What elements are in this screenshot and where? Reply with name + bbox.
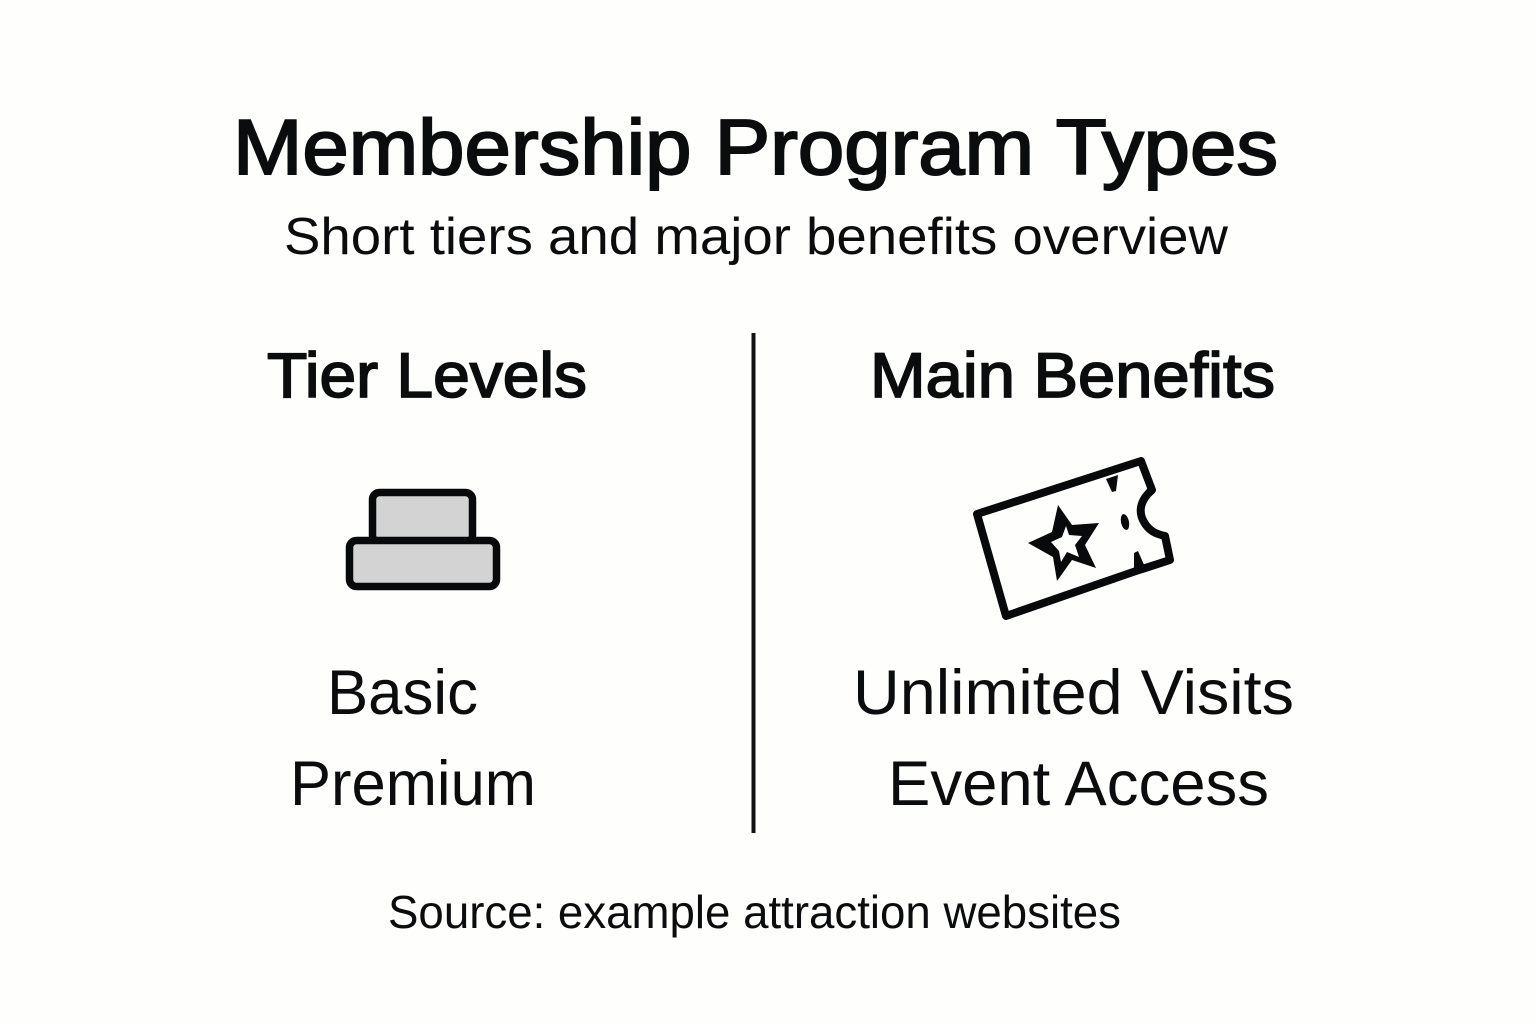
icon: stacked tiers	[350, 492, 496, 586]
source note: Source: example attraction websites	[388, 886, 1121, 938]
title: Membership Program Types	[233, 103, 1278, 191]
tier label: premium: Premium	[290, 749, 536, 819]
panel: main benefits	[853, 341, 1294, 819]
benefit label: unlimited visits: Unlimited Visits	[853, 658, 1294, 728]
subtitle: Short tiers and major benefits overview	[284, 208, 1228, 266]
tier label: basic: Basic	[327, 658, 478, 728]
heading: tier levels: Tier Levels	[267, 341, 587, 411]
center divider	[752, 333, 756, 833]
benefit label: event access: Event Access	[888, 749, 1269, 819]
icon: ticket with star	[977, 461, 1170, 616]
panel: tier levels	[267, 341, 587, 819]
heading: main benefits: Main Benefits	[870, 341, 1275, 411]
